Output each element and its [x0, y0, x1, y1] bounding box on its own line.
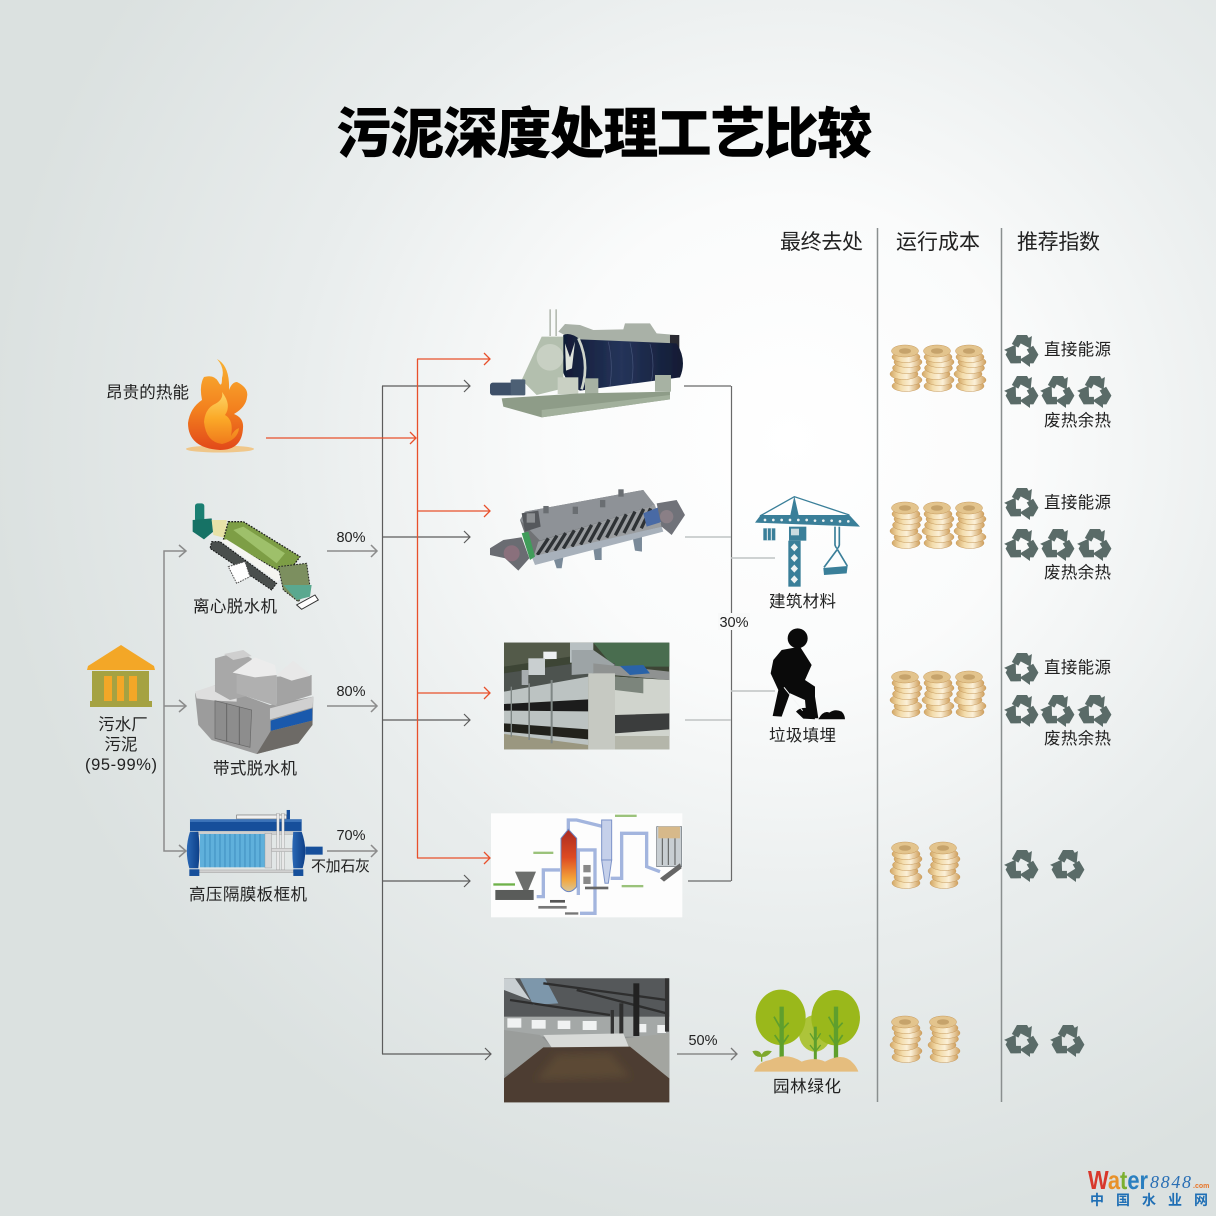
heading: running cost: 运行成本	[896, 231, 980, 254]
heading: recommendation index: 推荐指数	[1017, 231, 1100, 254]
icon: centrifuge dewatering machine	[193, 503, 318, 609]
label 昂贵的热能: 昂贵的热能	[106, 383, 189, 402]
label 30%: 30%	[719, 615, 749, 631]
label 不加石灰: 不加石灰	[311, 858, 370, 875]
recommendation row 2: 废热余热	[1044, 563, 1112, 582]
recommendation row 1: 直接能源	[1044, 340, 1111, 359]
label 建筑材料: 建筑材料	[769, 592, 836, 611]
title: 污泥深度处理工艺比较	[336, 89, 872, 169]
recommendation row 1	[1004, 336, 1112, 430]
label 园林绿化: 园林绿化	[773, 1077, 841, 1096]
label 80% middle: 80%	[336, 684, 366, 700]
label 污水厂污泥: 污水厂	[98, 715, 148, 734]
machine 4: fluidized bed incinerator diagram	[491, 813, 682, 917]
label 离心脱水机: 离心脱水机	[193, 597, 278, 616]
cost coins row 4	[890, 842, 960, 888]
label 高压隔膜板框机: 高压隔膜板框机	[189, 885, 308, 904]
icon: high pressure diaphragm filter press	[187, 810, 323, 876]
flow lines: dewatering output arrows	[327, 545, 377, 857]
recommendation row 3: 废热余热	[1044, 729, 1112, 748]
recommendation row 3: 直接能源	[1044, 658, 1111, 677]
machine 3: belt dryer photo	[504, 643, 669, 749]
label 污水厂污泥: 污泥	[104, 735, 138, 754]
watermark logo	[1088, 1165, 1209, 1210]
label 70%: 70%	[336, 828, 366, 844]
recommendation row 3	[1004, 654, 1112, 748]
label 污水厂污泥: (95-99%)	[85, 756, 157, 774]
cost coins row 5	[890, 1016, 960, 1062]
arrow: compost to greening with 50%	[677, 1033, 737, 1060]
label 垃圾填埋: 垃圾填埋	[769, 726, 836, 745]
arrow: compost to greening with 50%: 50%	[688, 1033, 718, 1049]
cost coins row 3	[890, 671, 986, 718]
label 80% upper: 80%	[336, 530, 366, 546]
flow lines: grey feed bus to dryers	[382, 380, 491, 1060]
flow lines: red heat bus	[266, 353, 490, 864]
icon: flame	[186, 359, 254, 452]
column headings	[780, 231, 1100, 254]
label 污水厂污泥	[85, 715, 157, 774]
recommendation row 1: 废热余热	[1044, 411, 1112, 430]
cost coins row 2	[890, 502, 986, 548]
watermark logo: .com	[1193, 1183, 1209, 1190]
recommendation row 5	[1004, 1026, 1084, 1057]
icon: worker digging	[771, 628, 845, 719]
machine 5: composting shed photo	[504, 978, 669, 1102]
recommendation row 2	[1004, 489, 1112, 582]
icon: trees	[753, 990, 860, 1072]
icon: tower crane	[755, 496, 860, 587]
cost coins row 1	[890, 345, 986, 392]
flow lines: dryers to final destination	[684, 386, 775, 881]
watermark logo: Water	[1088, 1165, 1148, 1195]
machine 1: rotary drum dryer	[490, 309, 683, 417]
column dividers	[878, 228, 1002, 1102]
icon: belt press dewatering machine	[195, 650, 313, 754]
flow lines: sludge source to dewatering machines	[164, 545, 186, 857]
watermark logo: 中国水业网	[1090, 1190, 1208, 1210]
recommendation row 4	[1004, 851, 1084, 882]
icon: sewage plant	[87, 645, 155, 707]
machine 2: paddle dryer	[490, 489, 685, 571]
label 带式脱水机: 带式脱水机	[213, 759, 298, 778]
recommendation row 2: 直接能源	[1044, 493, 1111, 512]
heading: final destination: 最终去处	[780, 231, 863, 254]
watermark logo: 8848	[1150, 1172, 1191, 1192]
